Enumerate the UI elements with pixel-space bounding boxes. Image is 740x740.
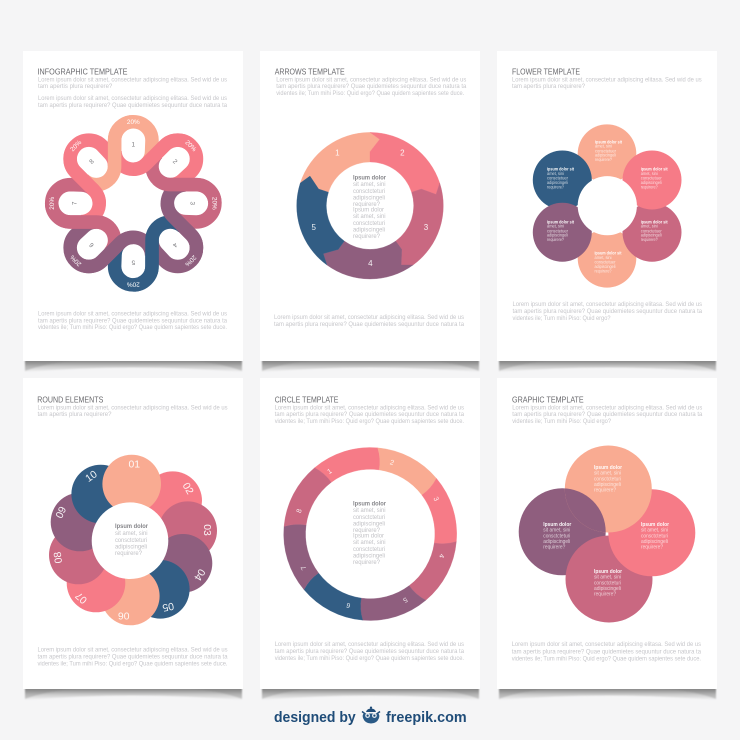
- centre text: adipiscingeli: [353, 194, 385, 202]
- centre text: Ipsum dolor: [353, 174, 387, 182]
- chart: six petal flower: Ipsum dolor sit: [641, 219, 668, 224]
- footer text: Lorem ipsum dolor sit amet, consectetur adipiscing elitasa. Sed wid de us: [38, 648, 228, 654]
- centre text: requirere?: [353, 233, 381, 240]
- chart: six petal flower: Ipsum dolor sit: [594, 251, 622, 256]
- chart: segmented ring: 3: [432, 496, 440, 503]
- chart: woven ribbon loops: 7: [71, 201, 78, 205]
- chart: four overlapping circles: consctcteturi: [594, 580, 621, 586]
- chart: six petal flower: adipiscingeli: [594, 264, 616, 269]
- chart: arrow ring: 4: [368, 259, 373, 268]
- centre text: adipiscingeli: [115, 544, 147, 550]
- panel: round elements: [23, 378, 243, 700]
- footer text: [274, 315, 465, 328]
- chart: six petal flower: amet, sini: [547, 171, 564, 176]
- centre text: consctcteturi: [353, 188, 385, 195]
- chart: four overlapping circles: requirere?: [543, 544, 565, 550]
- heading: ARROWS TEMPLATE: [275, 66, 345, 76]
- centre text: sit amet, sini: [353, 181, 386, 188]
- page shadow: [499, 360, 716, 372]
- intro text: tam apertis plura requirere? Quae quidemietes sequuntur duce natura ta: [275, 412, 465, 418]
- intro text: videntes ile; Tum mihi Piso: Quid ergo? Quae quidem sapientes sete duce.: [275, 419, 464, 425]
- intro text: Lorem ipsum dolor sit amet, consectetur adipiscing elitasa. Sed wid de us: [512, 77, 702, 83]
- centre text: consctcteturi: [115, 537, 147, 544]
- chart: six petal flower: consctetuer: [547, 176, 568, 181]
- chart: six petal flower: adipiscingeli: [547, 180, 568, 185]
- footer text: [512, 642, 702, 663]
- intro text: [512, 406, 703, 425]
- centre text: adipiscingeli: [353, 520, 385, 528]
- chart: four overlapping circles: Ipsum dolor: [594, 569, 623, 575]
- panel: arrows template: [260, 51, 480, 372]
- page sheet: [23, 378, 243, 689]
- chart: six petal flower: adipiscingeli: [641, 233, 662, 238]
- intro text: Lorem ipsum dolor sit amet, consectetur adipiscing elitasa. Sed wid de us: [276, 77, 466, 83]
- chart: segmented ring: 7: [300, 564, 308, 571]
- chart: ten overlapping circles: 03: [201, 524, 212, 536]
- intro text: [275, 406, 465, 425]
- footer text: tam apertis plura requirere? Quae quidemietes sequuntur duce natura ta: [512, 649, 702, 655]
- centre text: Ipsum dolor: [353, 206, 384, 214]
- heading: INFOGRAPHIC TEMPLATE: [38, 66, 128, 76]
- chart: four overlapping circles: [519, 446, 695, 622]
- footer text: [275, 642, 465, 662]
- chart: segmented ring: [262, 426, 478, 642]
- intro text: videntes ile; Tum mihi Piso: Quid ergo? Quae quidem sapientes sete duce.: [276, 91, 465, 97]
- icon: robot head logo: [362, 706, 380, 724]
- chart: woven ribbon loops: [40, 110, 226, 296]
- centre text: sit amet, sini: [353, 507, 386, 514]
- chart: segmented ring: 8: [296, 508, 304, 514]
- chart: ten overlapping circles: 02: [180, 481, 195, 497]
- chart: woven ribbon loops: 8: [88, 158, 96, 166]
- chart: woven ribbon loops: 5: [131, 258, 135, 265]
- chart: six petal flower: requirere?: [547, 237, 564, 242]
- footer text: tam apertis plura requirere? Quae quidemietes sequuntur duce natura ta: [274, 322, 465, 328]
- centre text: consctcteturi: [353, 514, 385, 521]
- panel: infographic template: [23, 51, 243, 372]
- intro text: Lorem ipsum dolor sit amet, consectetur adipiscing elitasa. Sed wid de us: [275, 406, 464, 412]
- chart: arrow ring: [271, 117, 461, 306]
- chart: four overlapping circles: sit amet, sini: [594, 575, 621, 581]
- chart: six petal flower: consctetuer: [594, 260, 616, 265]
- chart: ten overlapping circles: 07: [74, 589, 90, 605]
- intro text: videntes ile; Tum mihi Piso: Quid ergo?: [512, 419, 612, 425]
- page shadow: [262, 360, 479, 372]
- footer text: videntes ile; Tum mihi Piso: Quid ergo? Quae quidem sapientes sete duce.: [38, 662, 228, 668]
- footer text: videntes ile; Tum mihi Piso: Quid ergo?: [512, 316, 611, 322]
- footer text: [38, 312, 228, 331]
- chart: six petal flower: amet, sini: [594, 255, 612, 260]
- chart: woven ribbon loops: 20%: [183, 139, 198, 153]
- chart: four overlapping circles: adipiscingeli: [543, 539, 570, 545]
- centre text: [353, 500, 387, 566]
- chart: ten overlapping circles: 06: [118, 609, 129, 620]
- chart: four overlapping circles: consctcteturi: [641, 533, 668, 539]
- heading: GRAPHIC TEMPLATE: [512, 394, 584, 404]
- intro text: [38, 406, 228, 418]
- chart: four overlapping circles: adipiscingeli: [594, 482, 621, 488]
- chart: ten overlapping circles: 04: [191, 567, 207, 582]
- chart: ten overlapping circles: [49, 455, 217, 625]
- chart: six petal flower: Ipsum dolor sit: [547, 219, 574, 224]
- chart: woven ribbon loops: 20%: [69, 253, 83, 267]
- chart: woven ribbon loops: 6: [88, 241, 96, 248]
- centre text: sit amet, sini: [353, 213, 386, 220]
- chart: segmented ring: 6: [346, 601, 351, 609]
- chart: woven ribbon loops: 20%: [183, 253, 197, 268]
- chart: segmented ring: 4: [437, 553, 445, 559]
- chart: arrow ring: 2: [400, 148, 405, 158]
- chart: six petal flower: amet, sini: [595, 144, 612, 149]
- chart: six petal flower: Ipsum dolor sit: [595, 139, 622, 144]
- chart: arrow ring: 1: [335, 148, 340, 158]
- chart: woven ribbon loops: 1: [132, 141, 136, 148]
- centre text: requirere?: [353, 559, 381, 566]
- centre text: Ipsum dolor: [353, 500, 387, 508]
- chart: six petal flower: amet, sini: [641, 224, 658, 229]
- centre text: adipiscingeli: [353, 226, 385, 234]
- panel: graphic template: [497, 378, 717, 700]
- credit text right: freepik.com: [386, 710, 467, 726]
- chart: four overlapping circles: adipiscingeli: [594, 586, 621, 592]
- footer text: tam apertis plura requirere? Quae quidemietes sequuntur duce natura ta: [512, 309, 703, 315]
- chart: four overlapping circles: sit amet, sini: [641, 528, 668, 534]
- chart: woven ribbon loops: 20%: [69, 139, 83, 153]
- chart: segmented ring: 2: [389, 459, 395, 467]
- chart: six petal flower: [533, 124, 682, 288]
- centre text: [353, 174, 387, 240]
- chart: woven ribbon loops: 20%: [211, 197, 218, 210]
- page sheet: [260, 378, 480, 689]
- chart: four overlapping circles: consctcteturi: [594, 476, 621, 482]
- intro text: [38, 77, 228, 109]
- centre text: sit amet, sini: [115, 530, 148, 537]
- footer text: videntes ile; Tum mihi Piso: Quid ergo? Quae quidem sapientes sete duce.: [512, 657, 701, 663]
- footer text: videntes ile; Tum mihi Piso: Quid ergo? Quae quidem sapientes sete duce.: [38, 325, 227, 331]
- intro text: [276, 77, 467, 97]
- chart: four overlapping circles: requirere?: [594, 488, 616, 494]
- page shadow: [499, 688, 716, 700]
- intro text: tam apertis plura requirere? Quae quidemietes sequuntur duce natura ta: [38, 103, 228, 109]
- intro text: Lorem ipsum dolor sit amet, consectetur adipiscing elitasa. Sed wid de us: [38, 406, 228, 412]
- chart: six petal flower: requirere?: [641, 237, 658, 242]
- intro text: Lorem ipsum dolor sit amet, consectetur adipiscing elitasa. Sed wid de us: [38, 77, 227, 83]
- heading: FLOWER TEMPLATE: [512, 66, 580, 76]
- chart: arrow ring: 3: [424, 223, 429, 232]
- chart: six petal flower: Ipsum dolor sit: [641, 167, 668, 172]
- chart: ten overlapping circles: 05: [161, 600, 175, 613]
- intro text: Lorem ipsum dolor sit amet, consectetur adipiscing elitasa. Sed wid de us: [38, 96, 227, 102]
- chart: ten overlapping circles: 01: [129, 460, 140, 471]
- footer text: tam apertis plura requirere? Quae quidemietes sequuntur duce natura ta: [275, 649, 465, 655]
- chart: six petal flower: requirere?: [641, 184, 658, 189]
- footer text: Lorem ipsum dolor sit amet, consectetur adipiscing elitasa. Sed wid de us: [512, 642, 701, 648]
- centre text: consctcteturi: [353, 546, 385, 553]
- chart: four overlapping circles: requirere?: [641, 544, 663, 550]
- centre text: consctcteturi: [353, 220, 385, 227]
- centre text: sit amet, sini: [353, 539, 386, 546]
- chart: six petal flower: adipiscingeli: [595, 153, 616, 158]
- heading: ROUND ELEMENTS: [37, 394, 104, 404]
- chart: woven ribbon loops: 20%: [127, 281, 140, 288]
- chart: woven ribbon loops: 2: [171, 158, 179, 166]
- chart: four overlapping circles: Ipsum dolor: [543, 522, 572, 528]
- heading: CIRCLE TEMPLATE: [275, 394, 339, 404]
- chart: six petal flower: adipiscingeli: [547, 233, 568, 238]
- chart: four overlapping circles: consctcteturi: [543, 533, 570, 539]
- panel: flower template: [497, 51, 717, 372]
- chart: ten overlapping circles: 10: [84, 469, 100, 485]
- chart: segmented ring: 1: [326, 468, 334, 476]
- chart: six petal flower: Ipsum dolor sit: [547, 167, 574, 172]
- footer text: Lorem ipsum dolor sit amet, consectetur adipiscing elitasa. Sed wid de us: [38, 312, 227, 318]
- footer text: tam apertis plura requirere? Quae quidemietes sequuntur duce natura ta: [38, 318, 228, 324]
- intro text: Lorem ipsum dolor sit amet, consectetur adipiscing elitasa. Sed wid de us: [512, 406, 702, 412]
- chart: six petal flower: requirere?: [547, 184, 564, 189]
- footer text: [38, 648, 228, 668]
- footer text: Lorem ipsum dolor sit amet, consectetur adipiscing elitasa. Sed wid de us: [512, 302, 702, 308]
- centre text: requirere?: [353, 527, 381, 534]
- footer text: [512, 302, 703, 322]
- attribution footer: [274, 706, 467, 726]
- centre text: requirere?: [353, 201, 381, 208]
- chart: four overlapping circles: Ipsum dolor: [641, 522, 670, 528]
- chart: six petal flower: amet, sini: [641, 171, 658, 176]
- page sheet: [497, 51, 717, 361]
- chart: six petal flower: requirere?: [595, 157, 612, 162]
- intro text: [512, 77, 702, 90]
- panel: circle template: [260, 378, 480, 700]
- chart: six petal flower: consctetuer: [641, 176, 662, 181]
- chart: six petal flower: consctetuer: [547, 228, 568, 233]
- chart: six petal flower: amet, sini: [547, 224, 564, 229]
- chart: woven ribbon loops: 20%: [49, 197, 56, 210]
- chart: woven ribbon loops: 4: [171, 241, 178, 249]
- chart: ten overlapping circles: 09: [54, 505, 69, 520]
- intro text: tam apertis plura requirere? Quae quidemietes sequuntur duce natura ta: [276, 84, 467, 90]
- centre text: Ipsum dolor: [353, 532, 384, 540]
- chart: arrow ring: 5: [311, 223, 316, 232]
- chart: segmented ring: 5: [401, 595, 408, 603]
- footer text: videntes ile; Tum mihi Piso: Quid ergo? Quae quidem sapientes sete duce.: [275, 656, 464, 662]
- chart: four overlapping circles: adipiscingeli: [641, 539, 668, 545]
- page shadow: [25, 360, 242, 372]
- centre text: [115, 523, 149, 557]
- chart: woven ribbon loops: 20%: [127, 119, 140, 126]
- centre text: requirere?: [115, 550, 143, 557]
- page sheet: [497, 378, 717, 689]
- centre text: adipiscingeli: [353, 552, 385, 560]
- chart: four overlapping circles: requirere?: [594, 591, 616, 597]
- centre text: Ipsum dolor: [115, 523, 149, 530]
- chart: six petal flower: consctetuer: [641, 228, 662, 233]
- chart: four overlapping circles: Ipsum dolor: [594, 465, 623, 471]
- footer text: Lorem ipsum dolor sit amet, consectetur adipiscing elitasa. Sed wid de us: [274, 315, 464, 321]
- page sheet: [260, 51, 480, 361]
- intro text: tam apertis plura requirere? Quae quidemietes sequuntur duce natura ta: [512, 412, 703, 418]
- intro text: tam apertis plura requirere?: [38, 412, 112, 418]
- page shadow: [262, 688, 479, 700]
- footer text: Lorem ipsum dolor sit amet, consectetur adipiscing elitasa. Sed wid de us: [275, 642, 464, 648]
- intro text: tam apertis plura requirere?: [512, 84, 586, 90]
- page shadow: [25, 688, 242, 700]
- chart: four overlapping circles: sit amet, sini: [543, 528, 570, 534]
- chart: woven ribbon loops: 3: [188, 202, 195, 206]
- chart: six petal flower: consctetuer: [595, 148, 616, 153]
- chart: six petal flower: adipiscingeli: [641, 180, 662, 185]
- chart: four overlapping circles: sit amet, sini: [594, 471, 621, 477]
- page sheet: [23, 51, 243, 361]
- credit text left: designed by: [274, 710, 356, 726]
- footer text: tam apertis plura requirere? Quae quidemietes sequuntur duce natura ta: [38, 655, 228, 661]
- intro text: tam apertis plura requirere?: [38, 84, 113, 90]
- chart: six petal flower: requirere?: [594, 268, 612, 273]
- chart: ten overlapping circles: 08: [53, 551, 65, 564]
